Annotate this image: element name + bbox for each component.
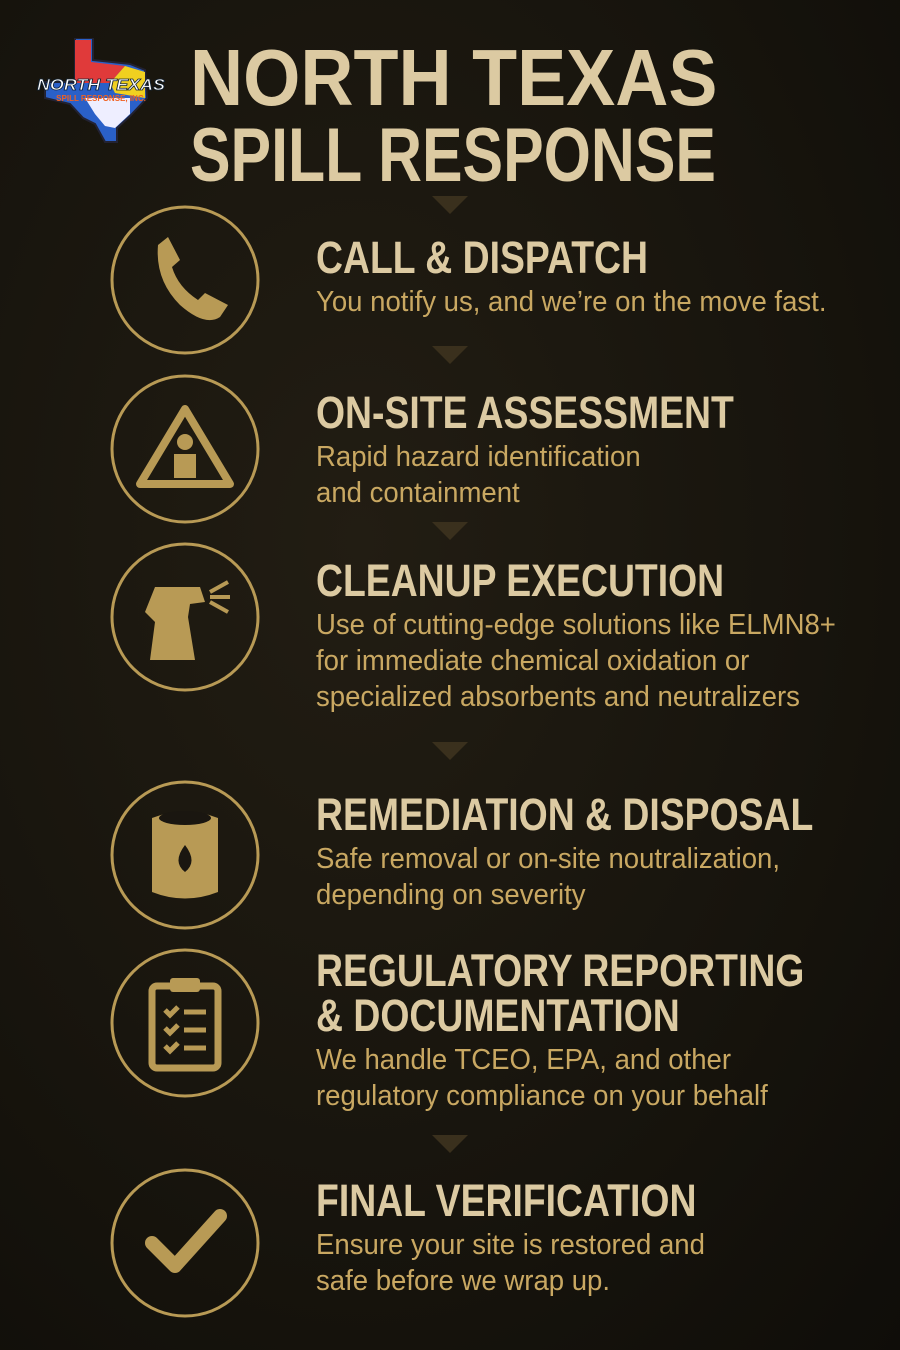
icon: warning — [110, 374, 260, 524]
text: & DOCUMENTATION — [316, 990, 680, 1041]
icon: spray bottle — [110, 542, 260, 692]
text: CLEANUP EXECUTION — [316, 555, 724, 606]
logo: NORTH TEXAS — [37, 77, 165, 94]
text: FINAL VERIFICATION — [316, 1175, 696, 1226]
icon: clipboard — [110, 948, 260, 1098]
title: SPILL RESPONSE — [190, 113, 716, 198]
step: cleanup — [110, 542, 836, 713]
text: safe before we wrap up. — [316, 1265, 610, 1297]
text: Ensure your site is restored and — [316, 1229, 705, 1261]
text: Safe removal or on-site noutralization, — [316, 843, 780, 875]
text: and containment — [316, 477, 520, 509]
icon: barrel — [110, 780, 260, 930]
text: regulatory compliance on your behalf — [316, 1080, 768, 1112]
arrow — [432, 742, 468, 760]
title — [190, 33, 717, 198]
arrow — [432, 1135, 468, 1153]
step: call & dispatch — [110, 206, 827, 354]
text: You notify us, and we’re on the move fast. — [316, 286, 827, 318]
text: depending on severity — [316, 879, 586, 911]
icon: check — [110, 1168, 260, 1318]
step: remediation — [110, 780, 813, 930]
step: reporting — [110, 945, 804, 1112]
logo — [36, 38, 166, 143]
text: Rapid hazard identification — [316, 441, 641, 473]
text: specialized absorbents and neutralizers — [316, 681, 800, 713]
arrow — [432, 522, 468, 540]
text: CALL & DISPATCH — [316, 232, 648, 283]
step: assessment — [110, 374, 734, 524]
arrow — [432, 346, 468, 364]
arrow — [432, 196, 468, 214]
logo: SPILL RESPONSE, INC. — [56, 94, 146, 103]
text: REMEDIATION & DISPOSAL — [316, 789, 813, 840]
text: Use of cutting-edge solutions like ELMN8+ — [316, 609, 836, 641]
step: verification — [110, 1168, 705, 1318]
title: NORTH TEXAS — [190, 33, 717, 122]
icon: phone — [110, 206, 260, 354]
text: for immediate chemical oxidation or — [316, 645, 749, 677]
text: ON-SITE ASSESSMENT — [316, 387, 734, 438]
text: REGULATORY REPORTING — [316, 945, 804, 996]
text: We handle TCEO, EPA, and other — [316, 1044, 731, 1076]
